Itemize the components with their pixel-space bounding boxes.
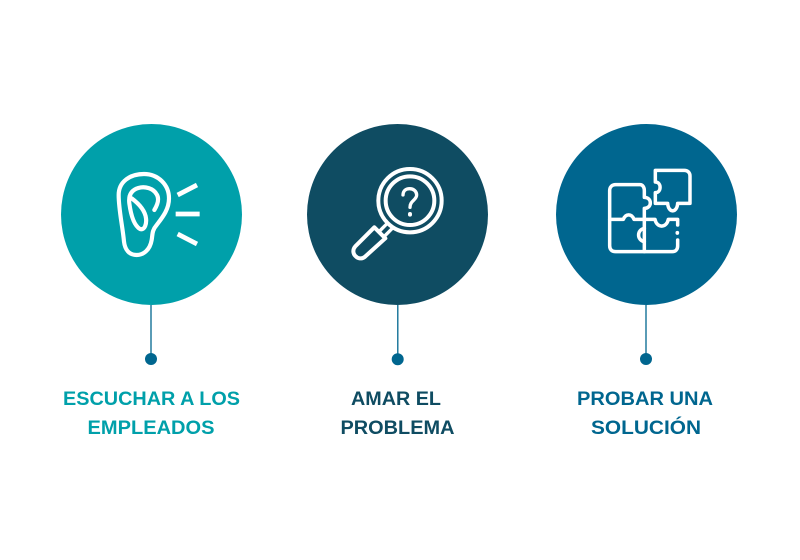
label	[340, 389, 455, 439]
panel: escuchar a los empleados	[61, 124, 242, 439]
label: AMAR EL	[351, 389, 441, 410]
label: ESCUCHAR A LOS	[63, 389, 240, 410]
dark teal circle	[307, 124, 488, 305]
connector line	[397, 305, 399, 359]
connector dot	[640, 353, 652, 365]
panel: probar una solucion	[556, 124, 737, 439]
label	[577, 389, 713, 439]
icon: ear with sound lines	[119, 174, 200, 255]
connector dot	[392, 353, 404, 365]
blue circle	[556, 124, 737, 305]
panel: amar el problema	[307, 124, 488, 439]
connector dot	[145, 353, 157, 365]
label	[63, 389, 240, 439]
teal circle	[61, 124, 242, 305]
icon: puzzle pieces	[610, 170, 690, 252]
icon: magnifying glass with question mark	[353, 169, 442, 258]
label: EMPLEADOS	[88, 418, 214, 439]
connector line	[645, 305, 647, 359]
label: PROBAR UNA	[577, 389, 713, 410]
connector line	[150, 305, 152, 359]
label: SOLUCIÓN	[591, 417, 701, 439]
label: PROBLEMA	[340, 418, 455, 439]
